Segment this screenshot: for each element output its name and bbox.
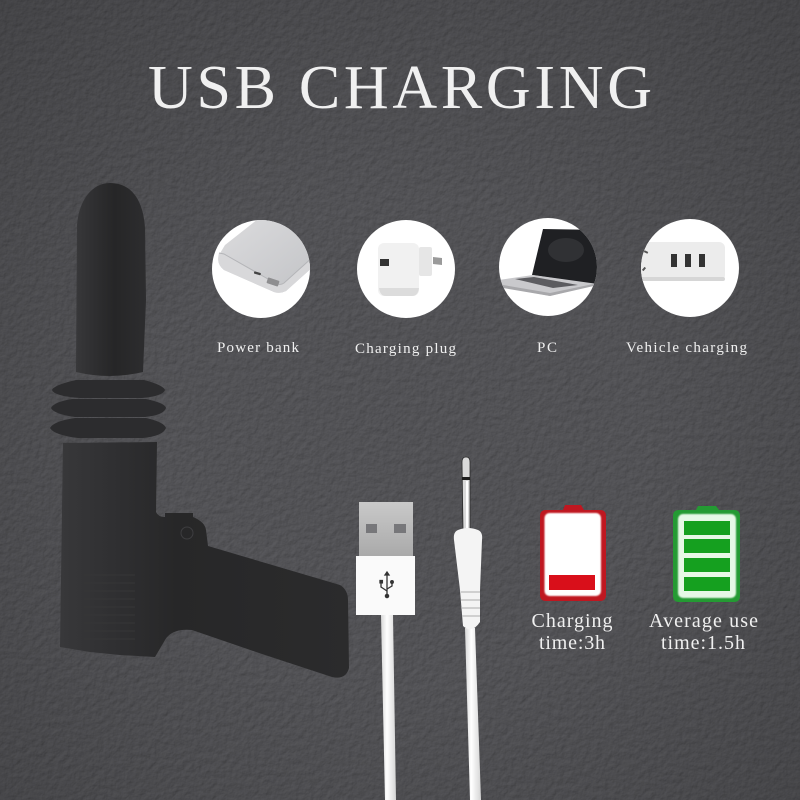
ribbed collar bbox=[50, 380, 166, 438]
DC jack cable bbox=[454, 457, 482, 800]
plug housing bbox=[454, 528, 482, 629]
icon: vehicle charging bbox=[636, 219, 739, 317]
icon: charging plug bbox=[357, 220, 455, 318]
lower body and grip bbox=[60, 442, 349, 678]
cable bbox=[465, 628, 481, 800]
strain relief ridges bbox=[461, 592, 480, 616]
label: average use time: Average use bbox=[649, 610, 758, 632]
label: vehicle charging: Vehicle charging bbox=[626, 340, 748, 356]
icon: power bank bbox=[212, 218, 315, 318]
label: charging time: time:3h bbox=[539, 632, 605, 654]
upper shaft bbox=[76, 183, 146, 376]
icon: red low battery bbox=[540, 505, 606, 601]
product silhouette: black handheld device bbox=[50, 183, 349, 678]
label: charging time: Charging bbox=[532, 610, 612, 632]
icon: laptop bbox=[499, 218, 600, 316]
grip ridges bbox=[84, 575, 135, 639]
metal pin bbox=[462, 457, 470, 529]
connector housing bbox=[356, 556, 415, 615]
grip button ring bbox=[181, 527, 193, 539]
title: USB CHARGING bbox=[148, 54, 652, 122]
USB-A cable bbox=[356, 502, 415, 800]
cable bbox=[381, 615, 396, 800]
icon: USB symbol bbox=[380, 572, 393, 598]
label: average use time: time:1.5h bbox=[661, 632, 745, 654]
icon: green full battery bbox=[673, 506, 740, 602]
label: charging time bbox=[532, 610, 612, 654]
label: power bank: Power bank bbox=[217, 340, 300, 356]
metal connector bbox=[359, 502, 413, 557]
label: charging plug: Charging plug bbox=[355, 341, 456, 357]
label: average use time bbox=[649, 610, 758, 654]
label: PC: PC bbox=[537, 340, 557, 356]
